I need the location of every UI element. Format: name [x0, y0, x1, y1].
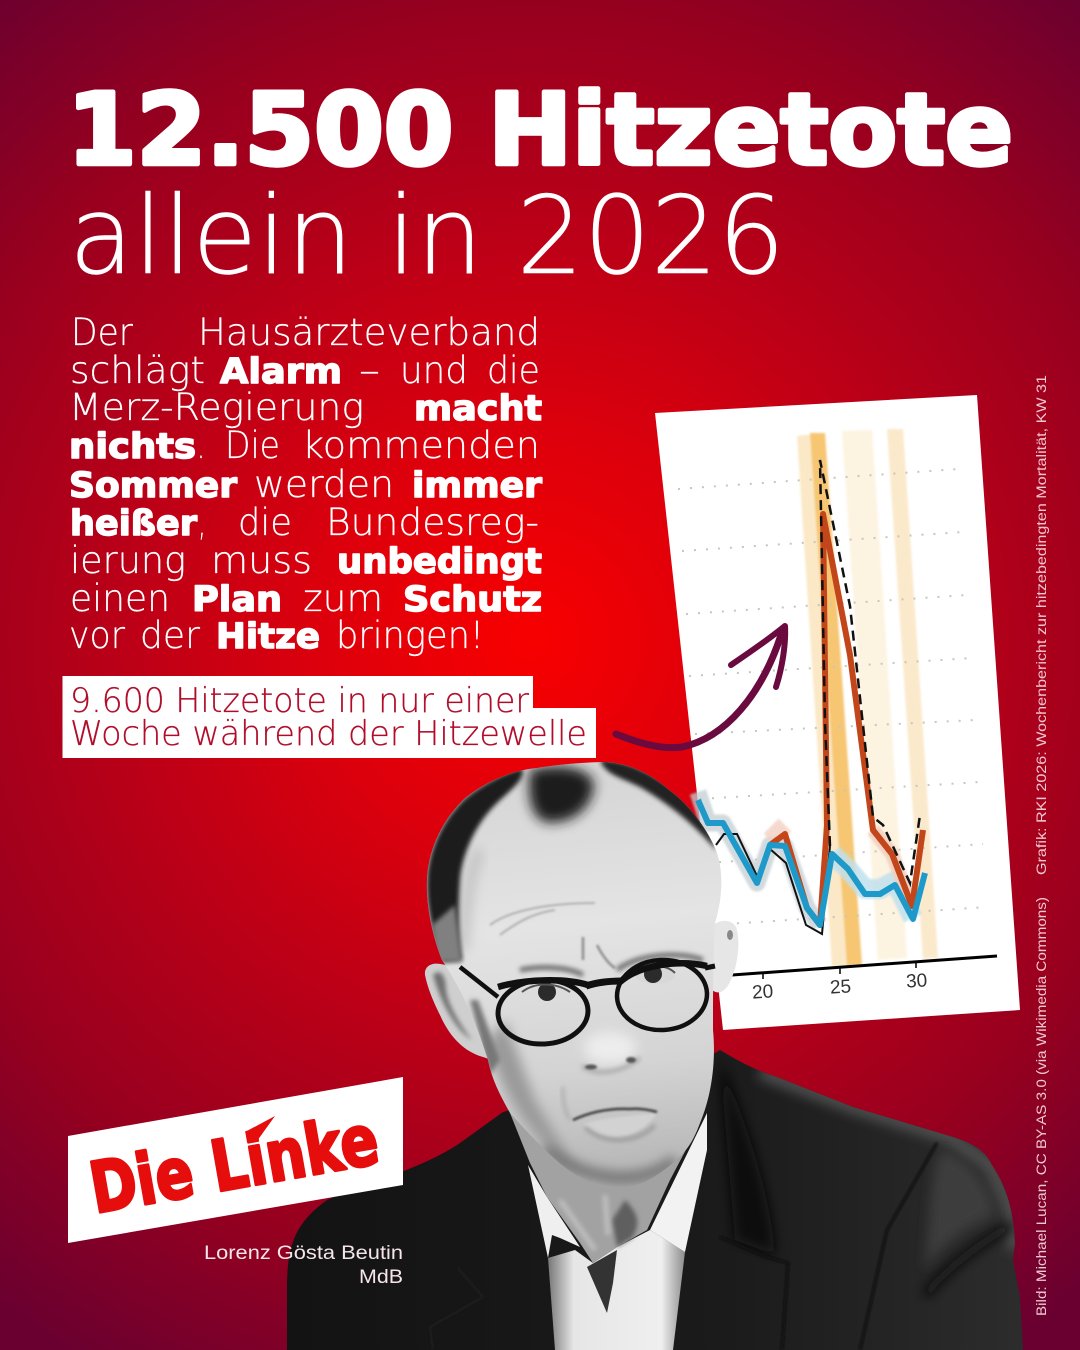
body text block: kommenden	[302, 424, 540, 467]
portrait: face shading	[463, 850, 675, 1178]
chart: x axis: 20	[751, 981, 774, 1004]
body text block: heißer	[70, 504, 198, 544]
author name: MdB	[359, 1267, 403, 1288]
callout: 9.600 Hitzetote	[62, 676, 596, 758]
chart: heatwave bands	[797, 429, 938, 967]
arrow to chart peak	[616, 626, 785, 748]
chart: confidence bands	[698, 792, 913, 925]
portrait: left ear	[425, 964, 500, 1062]
chart credit: Grafik: RKI 2026: Wochenbericht zur hitzebedingten Mortalität, KW 31	[1034, 375, 1049, 875]
body text block: unbedingt	[337, 542, 542, 582]
body text block: muss	[211, 539, 312, 582]
body text block: Schutz	[403, 580, 542, 620]
body text block: die	[487, 349, 540, 392]
portrait: face	[427, 762, 721, 1187]
body text block: –	[359, 349, 380, 392]
chart: black line	[716, 834, 830, 934]
callout: 9.600 Hitzetote: 9.600 Hitzetote in nur einer	[70, 681, 529, 721]
portrait: shirt	[528, 1113, 707, 1350]
chart: red line	[770, 514, 923, 925]
chart: x axis: 30	[905, 970, 928, 993]
portrait: glasses	[460, 958, 715, 1046]
body text block: bringen!	[336, 614, 484, 657]
body text block	[69, 311, 543, 657]
portrait: eyebrows	[520, 955, 703, 975]
chart: x axis	[732, 956, 997, 1004]
body text block: der	[140, 614, 201, 657]
portrait: jacket	[280, 1040, 1030, 1350]
portrait: man with glasses in black and white	[280, 760, 1030, 1350]
logo: Die Linke: Die Linke	[84, 1098, 385, 1230]
body text block: Plan	[192, 580, 282, 620]
body text block: Der	[71, 311, 134, 354]
portrait: neck	[510, 1113, 700, 1263]
subtitle: allein in 2026: allein in 2026	[69, 174, 785, 299]
body text block: werden	[254, 463, 394, 506]
portrait: eyes	[522, 965, 675, 1002]
body text block: ierung	[70, 539, 186, 582]
body text block: Hitze	[216, 617, 320, 657]
body text block: nichts	[69, 427, 196, 467]
body text block: Die	[225, 424, 280, 467]
body text block: ,	[198, 501, 206, 544]
body text block: schlägt	[70, 349, 205, 392]
image credit: Bild: Michael Lucan, CC BY-AS 3.0 (via Wikimedia Commons)	[1034, 897, 1049, 1316]
chart: blue line	[698, 800, 925, 925]
body text block: Alarm	[220, 352, 342, 392]
chart: dashed line	[820, 460, 920, 883]
body text block: und	[400, 349, 468, 392]
body text block: Hausärzteverband	[198, 311, 540, 354]
body text block: immer	[412, 466, 543, 506]
portrait: hair	[427, 760, 716, 962]
body text block: .	[197, 424, 205, 467]
chart: heat mortality RKI	[655, 395, 1020, 1030]
portrait: nose	[582, 1032, 640, 1072]
logo: arrow tick	[245, 1116, 275, 1141]
portrait: mouth	[573, 1109, 657, 1140]
title: 12.500 Hitzetote: 12.500 Hitzetote	[67, 73, 1013, 188]
body text block: einen	[70, 577, 170, 620]
author name: Lorenz Gösta Beutin	[204, 1243, 403, 1264]
body text block: Merz-Regierung	[69, 386, 364, 429]
author name	[204, 1243, 403, 1288]
body text block: vor	[69, 614, 126, 657]
body text block: macht	[414, 389, 542, 429]
body text block: zum	[303, 577, 383, 620]
body text block: Sommer	[69, 466, 238, 506]
chart: x axis: 25	[829, 976, 852, 999]
body text block: Bundesreg-	[326, 501, 539, 544]
callout: 9.600 Hitzetote: Woche während der Hitzewelle	[70, 714, 587, 754]
portrait: right ear	[712, 921, 738, 992]
body text block: die	[238, 501, 292, 544]
